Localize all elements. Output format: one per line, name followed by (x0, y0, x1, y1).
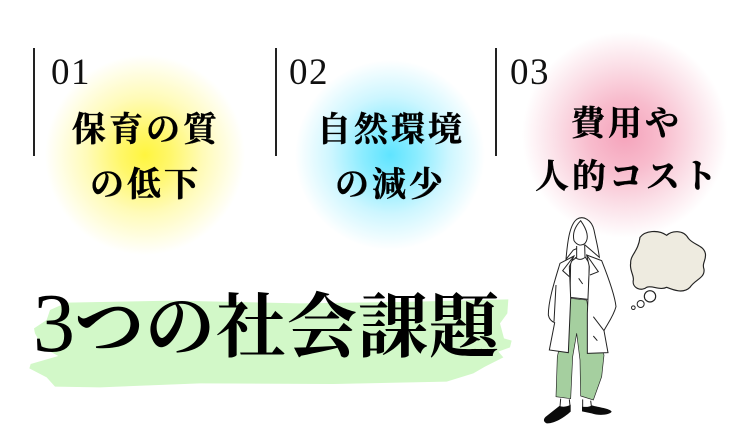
divider 03 (495, 48, 497, 156)
number 01: 01 (51, 52, 91, 93)
glow: pink (522, 32, 728, 238)
shoes (544, 399, 612, 423)
shirt (570, 245, 589, 299)
label 01 line 2: の低下 (90, 167, 201, 204)
thought bubble (630, 232, 706, 310)
trousers (556, 298, 604, 400)
brush stroke behind title (29, 299, 512, 388)
divider 02 (275, 48, 277, 156)
number 02: 02 (289, 52, 329, 93)
label 03 line 2: 人的コスト (535, 159, 720, 196)
glow: blue (295, 60, 485, 250)
label 02 line 2: の減少 (335, 167, 446, 204)
divider 01 (33, 48, 35, 156)
number 03: 03 (510, 52, 550, 93)
hair (566, 218, 599, 259)
title: 3つの社会課題 (33, 277, 500, 370)
item 03: costs and staffing (495, 48, 720, 196)
item 01: quality of childcare (33, 48, 220, 204)
illustration: woman with thought bubble (544, 217, 706, 424)
label 03 line 1: 費用や (571, 106, 682, 143)
item 02: natural environment (275, 48, 465, 204)
label 01 line 1: 保育の質 (72, 112, 220, 149)
glow: yellow (45, 55, 245, 255)
coat (548, 255, 616, 353)
label 02 line 1: 自然環境 (317, 112, 465, 149)
